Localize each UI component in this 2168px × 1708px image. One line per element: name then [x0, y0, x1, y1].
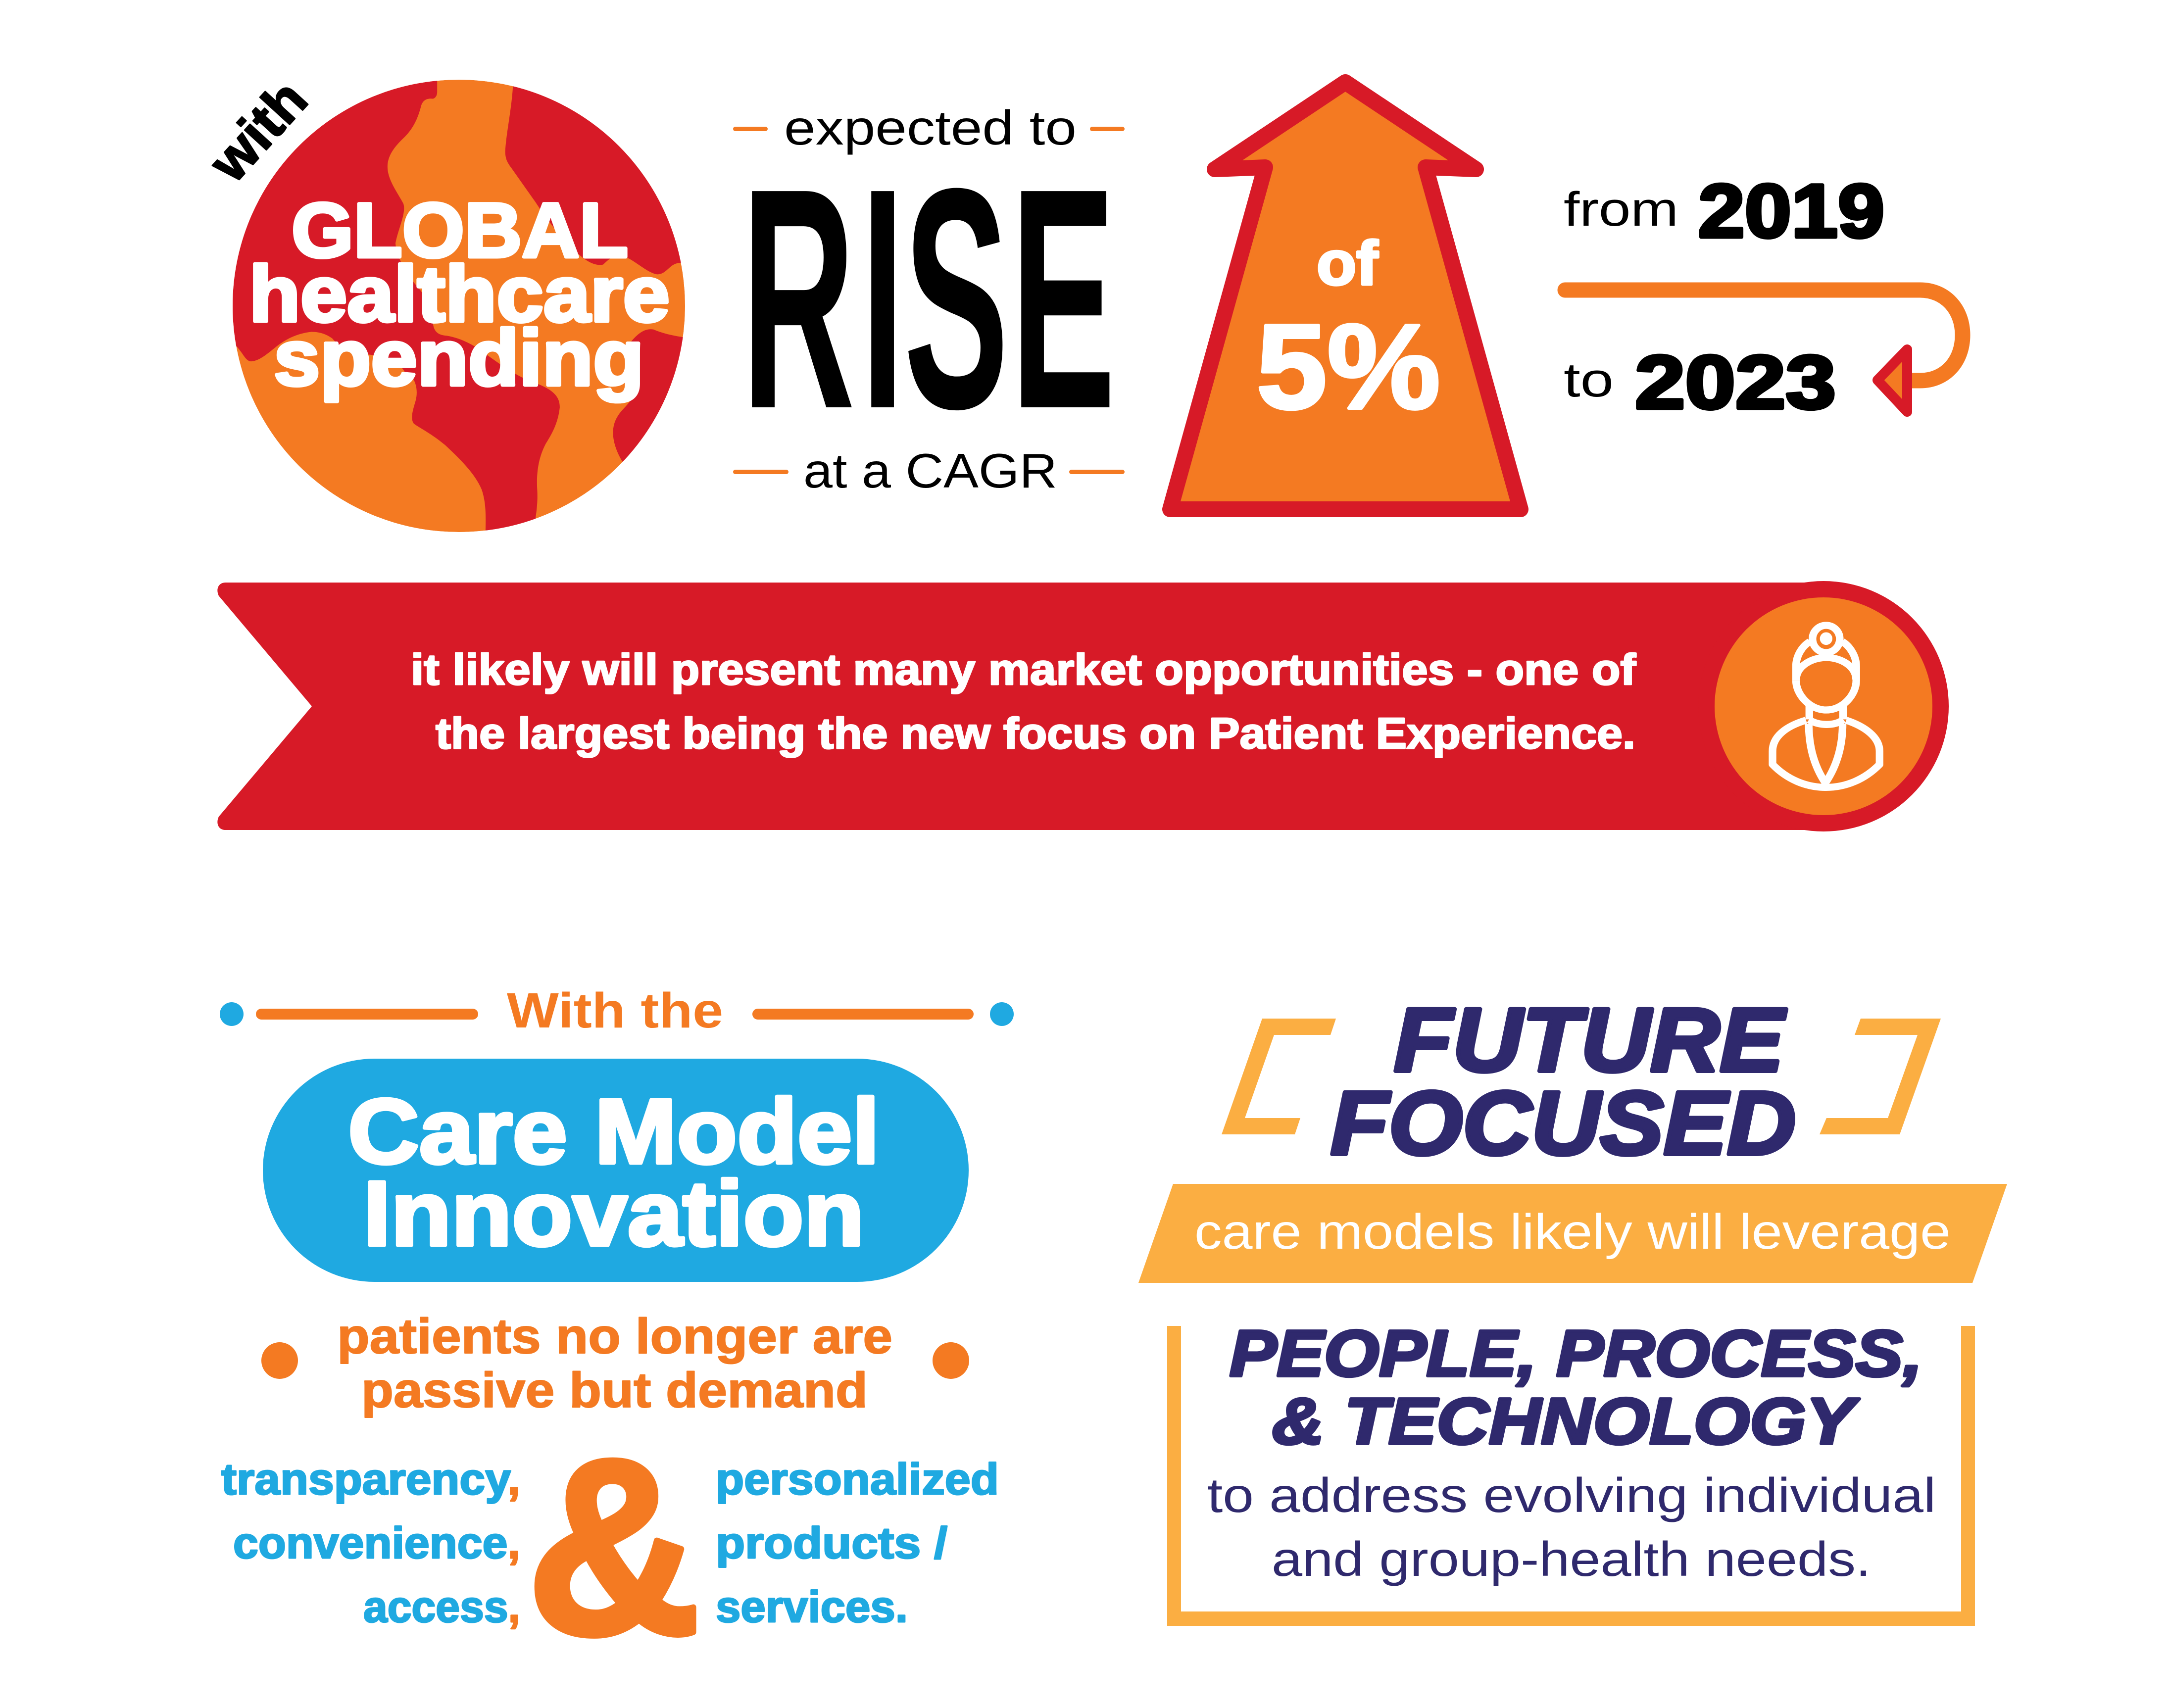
- text: banner line 1: it likely will present many market opportunities - one of: [411, 645, 1636, 694]
- text: expected to: expected to: [784, 100, 1077, 155]
- text: of: of: [1317, 228, 1379, 298]
- text: from: from: [1564, 182, 1678, 236]
- icon: globe: [233, 80, 685, 532]
- band: care models likely will leverage: [1138, 1184, 2007, 1283]
- text: at a CAGR: at a CAGR: [803, 443, 1057, 498]
- pill: care model innovation: Care Model: [348, 1080, 880, 1183]
- list: personalized products services: personalized: [716, 1454, 999, 1504]
- band: care models likely will leverage: care models likely will leverage: [1194, 1204, 1951, 1260]
- heading: healthcare: healthcare: [249, 249, 670, 338]
- heading: PEOPLE, PROCESS,: PEOPLE, PROCESS,: [1230, 1317, 1922, 1390]
- icon: doctor in orange circle: [1715, 597, 1932, 815]
- text: banner line 2: the largest being the new focus on Patient Experience.: [436, 709, 1635, 758]
- pill: care model innovation: [263, 1059, 969, 1282]
- list: transparency, convenience, access: transparency ,: [221, 1454, 520, 1504]
- text: patients no longer are passive but demand: patients no longer are: [337, 1309, 892, 1364]
- panel: expected to rise at a CAGR: [733, 100, 1125, 498]
- icon: big up arrow: [1170, 82, 1521, 509]
- text: to: to: [1564, 353, 1614, 407]
- list: personalized products services: services.: [716, 1582, 908, 1631]
- text: patients no longer are passive but demand: passive but demand: [361, 1363, 868, 1418]
- number: 2023: 2023: [1635, 340, 1836, 425]
- number: 2019: 2019: [1698, 169, 1884, 253]
- bracket: left: [1222, 1019, 1336, 1134]
- ribbon shape: [217, 583, 1823, 830]
- panel: care model innovation: [220, 983, 1014, 1687]
- text: and group-health needs: and group-health needs.: [1272, 1532, 1871, 1586]
- bracket: right: [1820, 1019, 1941, 1134]
- frame: people process technology box: [1167, 1326, 1975, 1626]
- heading: FUTURE: FUTURE: [1394, 989, 1786, 1090]
- heading: With the: With the: [507, 983, 723, 1038]
- heading: spending: spending: [274, 313, 644, 402]
- heading: With the: [220, 983, 1014, 1038]
- panel: up arrow of 5%: [1170, 82, 1521, 509]
- text: patients no longer are passive but demand: [261, 1309, 969, 1418]
- list: personalized products services: [716, 1454, 999, 1631]
- list: transparency, convenience, access: convenience,: [233, 1518, 520, 1567]
- list: transparency, convenience, access: [221, 1454, 520, 1631]
- banner: market opportunities ribbon: [217, 581, 1949, 831]
- label: with: with: [197, 68, 319, 194]
- panel: future focused: [1138, 989, 2007, 1626]
- number: 5%: 5%: [1256, 299, 1440, 434]
- list: transparency, convenience, access: access,: [363, 1582, 520, 1631]
- heading: & TECHNOLOGY: & TECHNOLOGY: [1272, 1385, 1860, 1458]
- panel: from 2019 to 2023: [1564, 169, 1963, 425]
- heading: GLOBAL: GLOBAL: [292, 188, 628, 274]
- panel: globe with global healthcare spending: [212, 80, 685, 532]
- arrow: curved year arrow: [1565, 290, 1963, 412]
- heading: RISE: RISE: [741, 124, 1116, 474]
- list: personalized products services: products /: [716, 1518, 947, 1567]
- icon: ampersand: &: [527, 1408, 701, 1687]
- heading: FOCUSED: FOCUSED: [1330, 1073, 1796, 1173]
- text: to address evolving individual: to address evolving individual: [1207, 1468, 1936, 1522]
- pill: care model innovation: Innovation: [363, 1163, 864, 1265]
